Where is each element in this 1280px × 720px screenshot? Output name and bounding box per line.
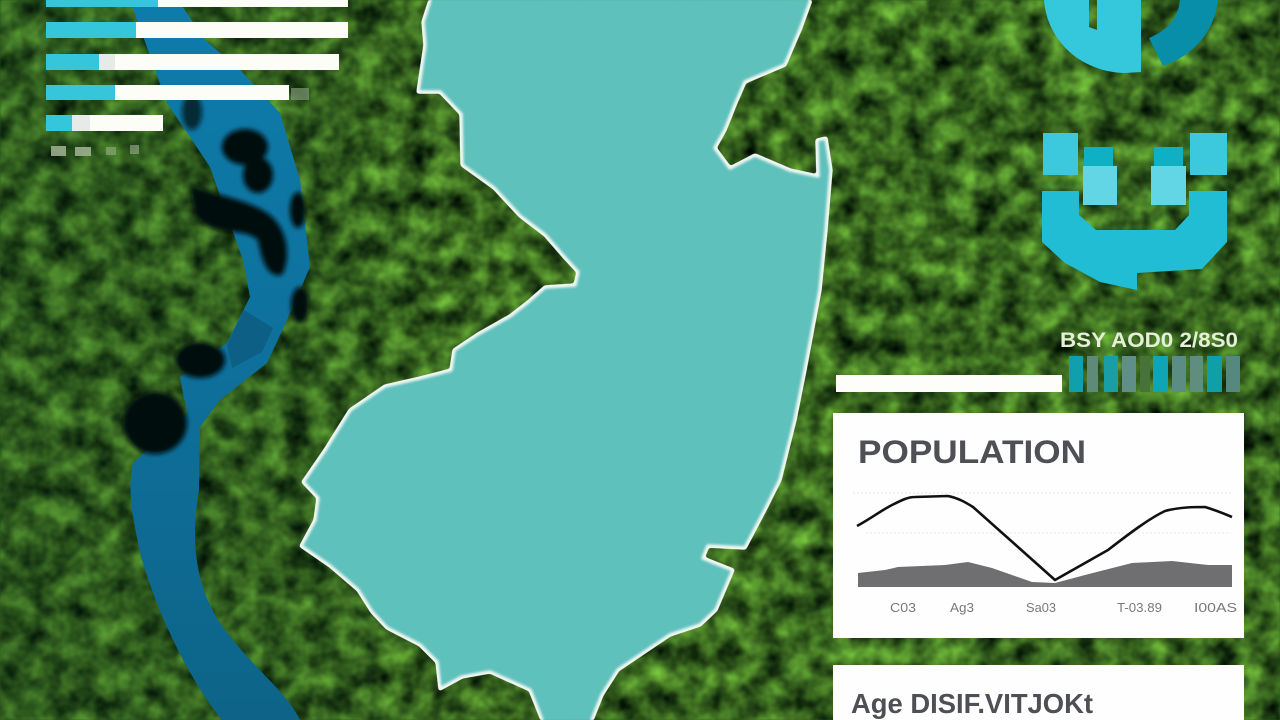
left square — [1043, 133, 1078, 175]
line series — [857, 496, 1232, 580]
axis labels: C03 — [890, 600, 916, 615]
panel: age distribution — [833, 665, 1244, 720]
bar 2 — [46, 22, 348, 38]
white progress bar — [836, 375, 1062, 392]
segmented strip — [1069, 356, 1240, 392]
bar 3 — [46, 54, 339, 70]
icon: smiling figure blocks — [1042, 133, 1227, 290]
bar 1 — [46, 0, 348, 7]
river shadow — [227, 310, 273, 368]
axis labels: Sа03 — [1026, 600, 1056, 615]
bar 4 — [46, 85, 309, 100]
pie: dark segment — [1149, 0, 1218, 66]
river — [123, 0, 310, 720]
right square — [1190, 133, 1227, 175]
axis labels — [890, 600, 1237, 615]
axis labels: T-03.89 — [1117, 600, 1162, 615]
left light block — [1083, 166, 1117, 205]
pie: light segment — [1044, 0, 1141, 73]
bar 5 — [46, 115, 163, 131]
tree shadows on the river — [123, 94, 309, 454]
right light block — [1151, 166, 1186, 205]
axis labels: I00АS — [1194, 600, 1237, 615]
left dark block — [1084, 147, 1113, 166]
heading: population: POPULATION — [858, 434, 1086, 470]
map: state shape — [301, 0, 831, 720]
faint bar label — [51, 145, 139, 156]
heading: age distribution: Age DISIF.VITJOKt — [851, 688, 1093, 719]
axis labels: Ag3 — [950, 600, 974, 615]
top-left bar list — [46, 0, 348, 156]
right dark block — [1154, 147, 1183, 166]
area series — [858, 561, 1232, 587]
caption: garbled heading: BSY AOD0 2/8S0 — [1060, 329, 1238, 352]
icon: pie chart fragment — [1044, 0, 1218, 73]
panel: population chart — [833, 413, 1244, 638]
curved base — [1042, 191, 1227, 290]
